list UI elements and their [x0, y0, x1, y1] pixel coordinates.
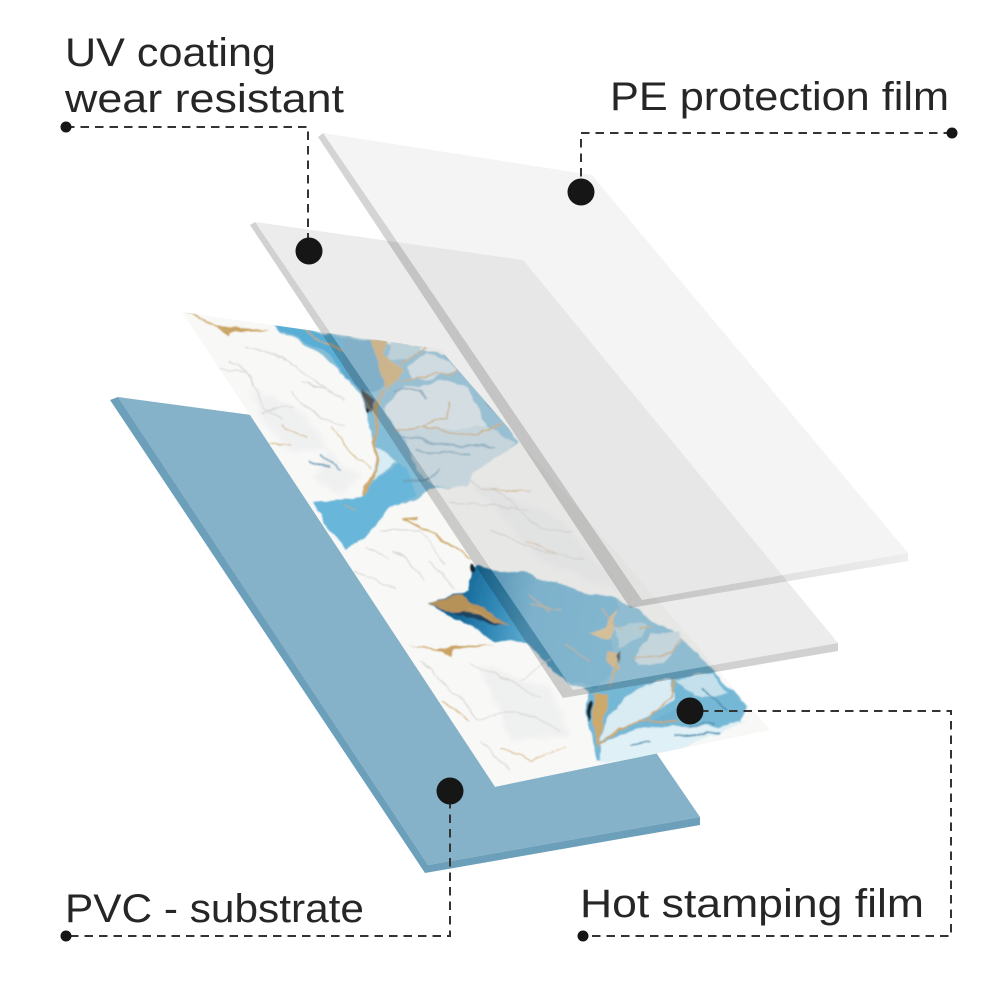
callout: PVC substrate: PVC - substrate — [65, 887, 364, 931]
lower blue marble area — [427, 567, 747, 760]
callout: hot stamping film: Hot stamping film — [580, 882, 924, 926]
UV layer edge — [250, 222, 838, 698]
gold veins — [187, 313, 683, 760]
PVC substrate board — [110, 397, 700, 873]
hot stamping marble film — [182, 312, 770, 787]
deep blue pool — [427, 567, 620, 690]
callout: UV coating — [60, 31, 344, 264]
UV coating layer — [250, 222, 838, 698]
grey marble cracks — [215, 345, 585, 770]
PE film edge — [318, 133, 908, 608]
PE protection film layer — [318, 133, 908, 608]
pale blue marble cells — [383, 380, 487, 430]
callout: hot stamping film — [578, 698, 951, 942]
dark vein accents — [362, 390, 623, 722]
callout: PE protection film — [568, 75, 958, 206]
blue marble lower right cells — [613, 623, 647, 648]
callout: PVC substrate — [60, 778, 464, 942]
grey marble shading — [262, 401, 562, 735]
blue marble dark streaks — [310, 385, 503, 482]
callout: UV coating: UV coating — [65, 31, 276, 75]
callout: UV coating: wear resistant — [64, 77, 344, 121]
upper blue marble area — [274, 325, 519, 510]
callout: PE protection film: PE protection film — [610, 75, 949, 119]
board side edge — [110, 397, 700, 873]
